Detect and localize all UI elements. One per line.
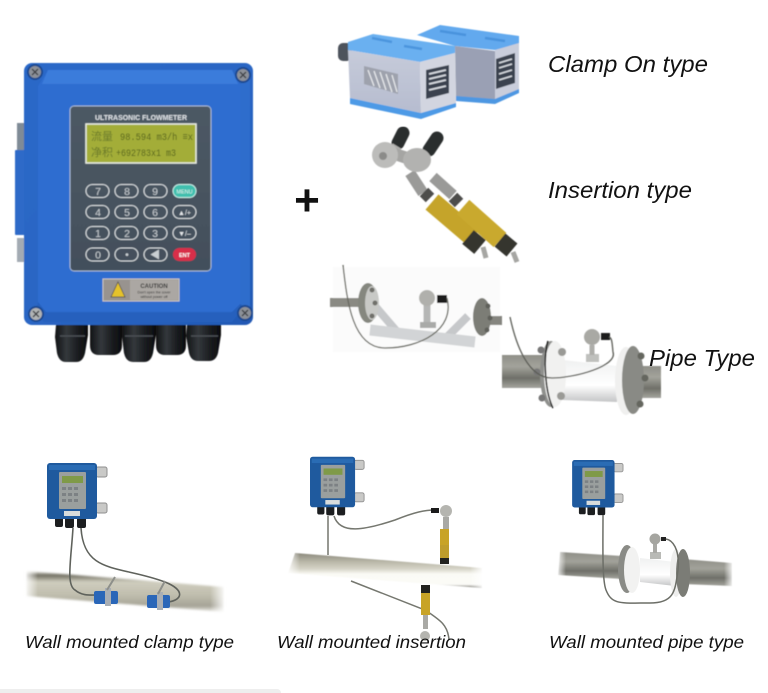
enclosure	[24, 63, 253, 325]
LCD display: 流量	[91, 129, 113, 143]
keypad: ▲/+	[178, 210, 191, 217]
caption: Wall mounted insertion	[277, 632, 466, 652]
keypad	[86, 184, 196, 262]
cables	[603, 515, 678, 603]
label: insertion type: Insertion type	[548, 177, 692, 203]
flanges	[618, 545, 690, 597]
LCD display: 98.594 m3/h ≡x	[120, 132, 193, 144]
keypad: 4	[95, 207, 101, 219]
caption: Wall mounted pipe type	[549, 632, 744, 652]
small meter	[310, 457, 364, 515]
keypad: ◀	[150, 249, 160, 261]
keypad: ENT	[179, 253, 191, 259]
sensor head	[650, 534, 666, 559]
keypad panel	[70, 106, 211, 271]
scene: wall mounted clamp type	[24, 463, 234, 652]
LCD display	[86, 124, 196, 163]
keypad: 8	[124, 186, 130, 198]
cables	[328, 510, 449, 640]
LCD display: 净积	[91, 145, 113, 159]
upper insertion sensor	[431, 505, 452, 564]
left hinge	[15, 123, 25, 262]
clamp transducers	[94, 577, 170, 610]
pipe	[24, 565, 226, 618]
lower insertion sensor	[420, 585, 430, 641]
keypad: MENU	[176, 190, 193, 196]
insertion transducers	[372, 133, 517, 262]
corner screws	[28, 65, 252, 321]
panel title: ULTRASONIC FLOWMETER	[95, 113, 188, 122]
plus sign: +	[294, 176, 320, 225]
pipe section with V-bracket	[330, 265, 502, 352]
bottom edge bar	[0, 689, 281, 693]
main flowmeter device	[15, 63, 253, 362]
clamp-on transducers	[338, 25, 519, 119]
pipe-type flowmeter	[502, 317, 661, 415]
small meter	[572, 460, 623, 515]
caution label: Don't open the cover	[137, 290, 171, 294]
small meter	[47, 463, 107, 528]
keypad: 2	[124, 228, 130, 240]
keypad: ▼/–	[178, 231, 191, 238]
keypad: 5	[124, 207, 130, 219]
caution label	[103, 279, 179, 301]
caption: Wall mounted clamp type	[25, 632, 234, 652]
front transducer	[338, 34, 456, 119]
keypad: 7	[95, 186, 101, 198]
LCD display: +692783x1 m3	[116, 148, 176, 160]
white meter body	[640, 558, 675, 586]
keypad: 6	[152, 207, 158, 219]
keypad: 1	[95, 228, 101, 240]
scene: wall mounted insertion	[277, 457, 484, 652]
pipes	[556, 548, 734, 590]
rear transducer	[417, 25, 519, 104]
label: clamp on type: Clamp On type	[548, 51, 708, 77]
pipe	[286, 548, 484, 592]
keypad: 3	[152, 228, 158, 240]
keypad: 9	[152, 186, 158, 198]
keypad: 0	[95, 250, 101, 262]
keypad: •	[125, 249, 129, 261]
cable glands	[55, 325, 221, 362]
scene: wall mounted pipe type	[549, 460, 744, 652]
caution label: without power off	[140, 295, 168, 299]
caution label: CAUTION	[140, 284, 168, 290]
label: pipe type: Pipe Type	[649, 345, 755, 371]
cables	[70, 528, 180, 602]
